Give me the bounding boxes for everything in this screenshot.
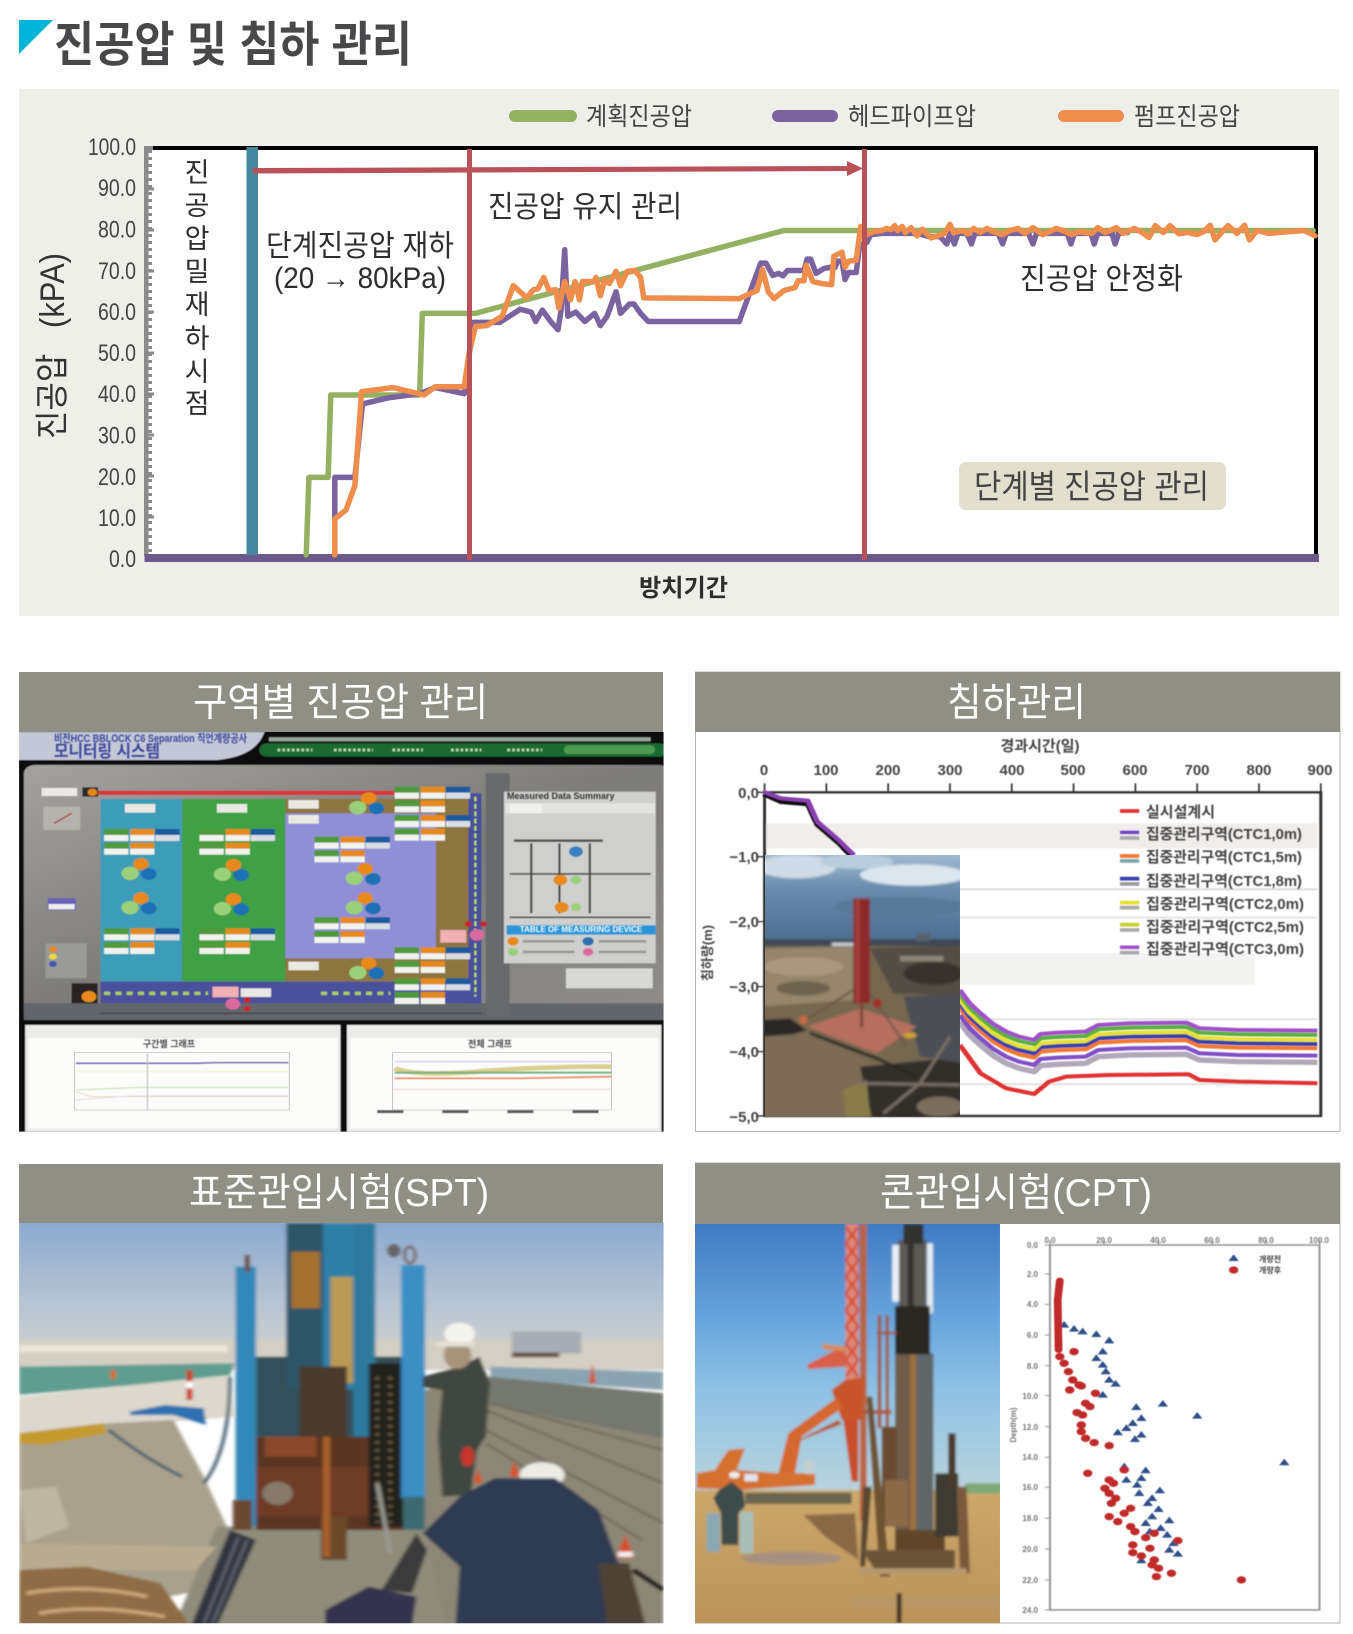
- CPT chart labels: 20.0: [1096, 1236, 1112, 1245]
- photo: CPT rig: [688, 1220, 1007, 1630]
- label: vacuum consolidation start (vertical): 공: [185, 191, 209, 221]
- heading: SPT: [19, 1164, 663, 1223]
- settlement chart legend: 집중관리구역(CTC1,8m): [1146, 873, 1302, 890]
- settlement chart axis labels: 600: [1122, 762, 1148, 779]
- heading: settlement management: 침하관리: [947, 682, 1086, 725]
- label: vacuum consolidation start (vertical): 밀: [185, 257, 209, 287]
- settlement chart axis labels: 0,0: [738, 785, 759, 802]
- settlement chart axis labels: 900: [1307, 762, 1333, 779]
- settlement chart legend: 실시설계시: [1146, 804, 1215, 821]
- CPT chart labels: 8.0: [1027, 1362, 1039, 1371]
- y axis tick labels: 70.0: [98, 258, 136, 285]
- photo: settlement plate: [765, 855, 960, 1117]
- settlement chart legend: [1146, 804, 1304, 958]
- settlement chart axis labels: 100: [813, 762, 839, 779]
- panel: stepwise vacuum pressure chart: [19, 89, 1339, 616]
- CPT chart labels: 12.0: [1022, 1423, 1039, 1432]
- screenshot caption: monitoring system title: 전체 그래프: [468, 1038, 512, 1049]
- label: vacuum holding management: 진공압 유지 관리: [488, 191, 682, 224]
- CPT chart labels: 10.0: [1022, 1392, 1039, 1401]
- CPT chart labels: 0.0: [1044, 1236, 1056, 1245]
- legend: 펌프진공압: [1134, 103, 1240, 131]
- panel: settlement management: [695, 672, 1340, 1132]
- label: vacuum consolidation start (vertical): 진: [185, 158, 209, 188]
- y axis tick labels: 50.0: [98, 340, 136, 367]
- chart: settlement over time: [700, 738, 1333, 1126]
- CPT chart labels: 80.0: [1258, 1236, 1274, 1245]
- heading: zone vacuum management: 구역별 진공압 관리: [193, 682, 488, 725]
- CPT chart labels: 24.0: [1022, 1606, 1039, 1615]
- y axis tick labels: 10.0: [98, 505, 136, 532]
- CPT chart labels: 16.0: [1022, 1483, 1039, 1492]
- CPT chart labels: [1009, 1236, 1330, 1615]
- heading: settlement management: [695, 672, 1340, 732]
- label: vacuum consolidation start (vertical): 시: [185, 357, 209, 387]
- settlement chart legend: 집중관리구역(CTC3,0m): [1146, 941, 1304, 958]
- heading: zone vacuum management: [19, 672, 663, 732]
- CPT chart labels: 6.0: [1027, 1331, 1039, 1340]
- CPT chart labels: Depth(m): [1009, 1407, 1018, 1443]
- label: stepwise loading: (20 → 80kPa): [274, 262, 446, 295]
- settlement chart axis labels: −5,0: [729, 1109, 759, 1126]
- settlement chart legend: 집중관리구역(CTC2,5m): [1146, 919, 1304, 936]
- CPT chart labels: 100.0: [1309, 1236, 1330, 1245]
- y axis tick labels: 30.0: [98, 422, 136, 450]
- heading: CPT: 콘관입시험(CPT): [880, 1172, 1152, 1215]
- settlement chart legend: 집중관리구역(CTC2,0m): [1146, 896, 1304, 913]
- callout: stepwise vacuum management: 단계별 진공압 관리: [974, 468, 1209, 505]
- legend: 계획진공압: [586, 103, 692, 131]
- label: vacuum consolidation start (vertical): 하: [185, 324, 210, 354]
- CPT chart labels: 14.0: [1022, 1453, 1039, 1462]
- settlement chart axis labels: 0: [760, 762, 768, 779]
- CPT chart labels: 40.0: [1150, 1236, 1166, 1245]
- panel: standard penetration test: [13, 1164, 668, 1627]
- settlement chart axis labels: 400: [999, 762, 1025, 779]
- settlement chart axis labels: 침하량(m): [700, 925, 715, 981]
- label: vacuum consolidation start (vertical): 재: [185, 290, 209, 320]
- y axis tick labels: 80.0: [98, 216, 136, 244]
- y axis tick labels: [88, 134, 136, 573]
- y axis tick labels: 60.0: [98, 299, 136, 326]
- label: stepwise loading: [266, 230, 454, 295]
- CPT chart labels: 개량전: [1259, 1254, 1281, 1264]
- screenshot caption: monitoring system title: 비전HCC BBLOCK C6 Separation 직언계량공사: [54, 731, 247, 745]
- y axis tick labels: 40.0: [98, 381, 136, 408]
- legend: 헤드파이프압: [848, 103, 976, 131]
- CPT chart labels: 0.0: [1027, 1241, 1039, 1250]
- y axis tick labels: 90.0: [98, 175, 136, 202]
- label: vacuum consolidation start (vertical): [185, 158, 210, 419]
- x axis title: 방치기간: [639, 575, 728, 602]
- icon: cyan title triangle: [19, 20, 53, 54]
- y axis tick labels: 20.0: [98, 464, 136, 491]
- screenshot caption: monitoring system title: 모니터링 시스템: [54, 742, 160, 761]
- panel: cone penetration test: [688, 1163, 1340, 1630]
- chart: plot area: [144, 146, 1319, 562]
- line: pump vacuum (orange): [335, 224, 1315, 555]
- settlement chart axis labels: 800: [1246, 762, 1272, 779]
- y axis title: 진공압 (kPA): [34, 253, 72, 439]
- line: planned vacuum (green): [306, 231, 1313, 555]
- screenshot caption: monitoring system title: 구간별 그래프: [143, 1038, 195, 1049]
- settlement chart axis labels: 300: [937, 762, 963, 779]
- CPT chart labels: 개량후: [1259, 1265, 1282, 1275]
- legend: [515, 103, 1240, 131]
- CPT chart labels: 2.0: [1027, 1270, 1039, 1279]
- y axis tick labels: 0.0: [109, 546, 136, 573]
- phase divider: start of holding: [467, 149, 472, 560]
- heading: SPT: 표준관입시험(SPT): [189, 1172, 489, 1215]
- settlement chart axis labels: −4,0: [729, 1044, 759, 1061]
- screenshot caption: monitoring system title: TABLE OF MEASURING DEVICE: [520, 925, 643, 934]
- panel: zone vacuum management: [13, 672, 672, 1135]
- CPT chart labels: 20.0: [1022, 1545, 1039, 1554]
- screenshot: monitoring system: [13, 729, 672, 1135]
- settlement chart axis labels: −3,0: [729, 979, 759, 996]
- settlement chart axis labels: [700, 738, 1333, 1126]
- y axis tick labels: 100.0: [88, 134, 136, 161]
- CPT chart labels: 22.0: [1022, 1576, 1039, 1585]
- settlement chart axis labels: −1,0: [729, 849, 759, 866]
- screenshot caption: monitoring system title: Measured Data Summary: [507, 791, 615, 801]
- settlement chart legend: 집중관리구역(CTC1,0m): [1146, 826, 1302, 843]
- label: vacuum consolidation start (vertical): 압: [185, 224, 209, 254]
- label: stepwise loading: 단계진공압 재하: [266, 230, 454, 263]
- screenshot caption: monitoring system title: [54, 731, 643, 1049]
- heading: CPT: [695, 1163, 1340, 1224]
- label: vacuum consolidation start (vertical): 점: [185, 389, 209, 419]
- chart: CPT scatter: [1009, 1236, 1330, 1615]
- arrow: holding period: [253, 161, 863, 176]
- CPT chart labels: 4.0: [1027, 1300, 1039, 1309]
- settlement chart axis labels: 500: [1060, 762, 1086, 779]
- CPT chart labels: 18.0: [1022, 1514, 1039, 1523]
- phase divider: end of holding: [862, 149, 867, 560]
- settlement chart legend: 집중관리구역(CTC1,5m): [1146, 849, 1302, 866]
- settlement chart axis labels: −2,0: [729, 914, 759, 931]
- CPT chart labels: 60.0: [1204, 1236, 1220, 1245]
- title: 진공압 및 침하 관리: [54, 19, 412, 72]
- line: head pipe pressure (purple): [335, 233, 1128, 555]
- settlement chart axis labels: 200: [875, 762, 901, 779]
- settlement chart axis labels: 700: [1184, 762, 1210, 779]
- label: vacuum stabilization: 진공압 안정화: [1020, 263, 1183, 296]
- photo: SPT rig and workers: [13, 1220, 668, 1627]
- settlement chart axis labels: 경과시간(일): [1000, 738, 1080, 755]
